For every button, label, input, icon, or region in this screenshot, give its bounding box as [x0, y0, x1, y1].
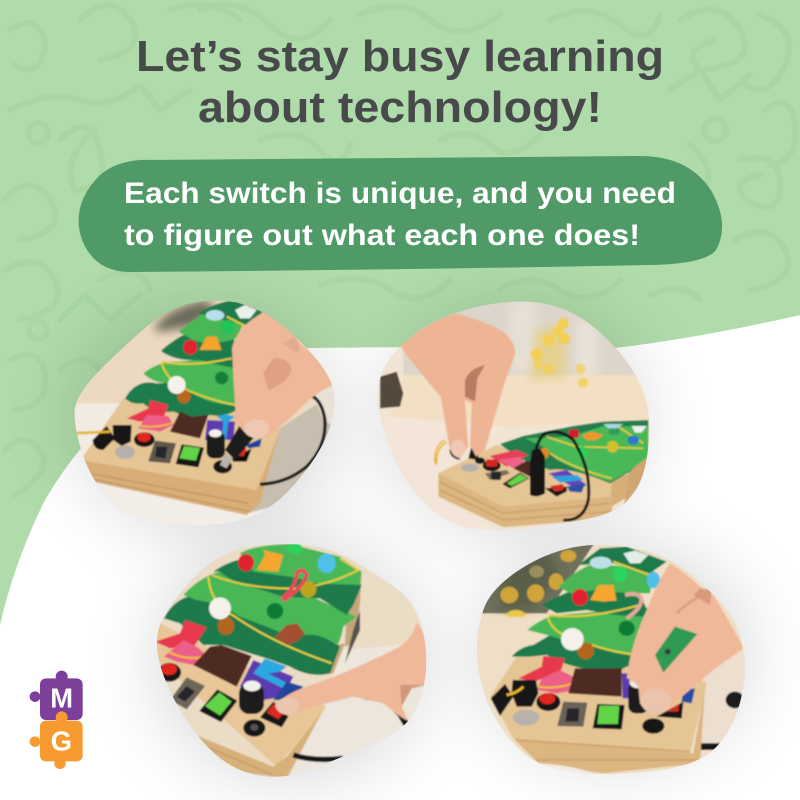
subtitle pill: [79, 156, 722, 272]
photo: fingers turning the knob with plug on board: [74, 300, 334, 525]
photo: hand pressing toggle switch: [378, 302, 650, 530]
icon: purple M puzzle piece: M: [50, 682, 73, 713]
logo: MG puzzle pieces: [30, 671, 83, 769]
title: Let’s stay busy learning: [136, 32, 664, 81]
photo: fingers turning knob beside bokeh lights: [476, 544, 745, 774]
subtitle text: [124, 177, 676, 252]
subtitle text: Each switch is unique, and you need: [124, 177, 676, 210]
title: [136, 32, 664, 132]
icon: orange G puzzle piece: G: [51, 725, 72, 756]
photo: finger pressing red switch: [156, 544, 426, 777]
title: about technology!: [198, 83, 602, 132]
soft photo shadows: [80, 315, 745, 775]
subtitle text: to figure out what each one does!: [124, 219, 640, 252]
white curved lower area: [0, 315, 800, 800]
